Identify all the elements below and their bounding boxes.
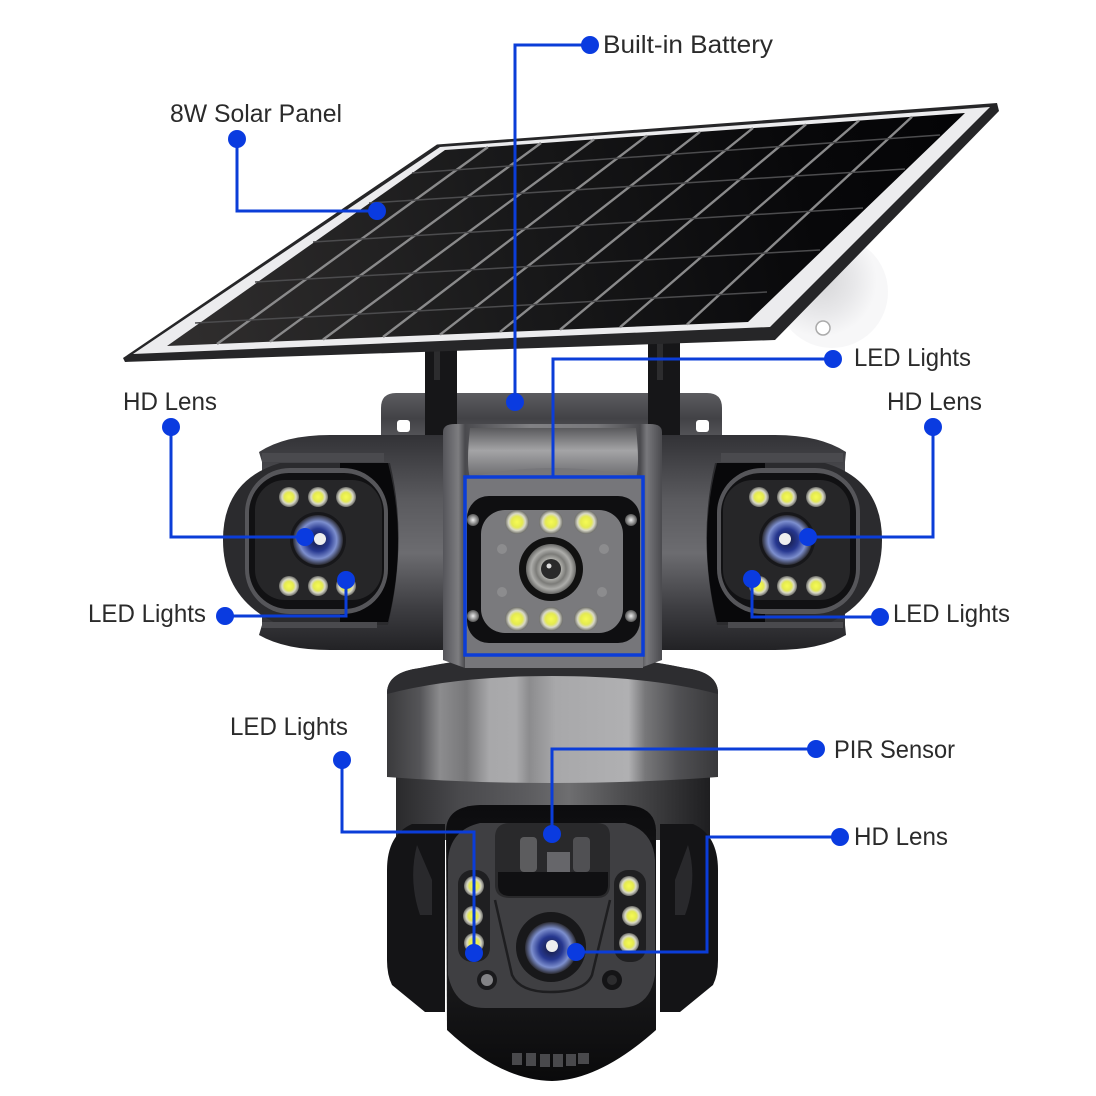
callout: Built-in Battery <box>506 31 774 411</box>
faceplate <box>448 823 655 1008</box>
head dome <box>446 805 656 1081</box>
callout: LED Lights, bottom <box>230 713 483 962</box>
pan-tilt neck cylinder <box>387 655 718 840</box>
icon: HD lens <box>759 512 815 568</box>
callout: HD Lens, left: HD Lens <box>123 388 217 416</box>
back mounting plate <box>381 380 722 445</box>
callout: Built-in Battery: Built-in Battery <box>603 31 774 59</box>
bottom PTZ head <box>387 805 718 1081</box>
icon: white wall mount bracket <box>776 236 888 348</box>
central camera housing <box>467 496 640 643</box>
icon: HD lens <box>290 512 346 568</box>
callout: LED Lights, left <box>88 571 355 628</box>
right camera pod <box>706 453 882 628</box>
right LED strip <box>614 870 646 962</box>
solar panel <box>123 103 999 362</box>
icon: bottom HD lens <box>495 900 610 992</box>
small sensors <box>477 970 622 990</box>
LEDs <box>505 510 598 631</box>
callout: LED Lights, bottom: LED Lights <box>230 713 348 741</box>
side yoke arms <box>387 824 445 1012</box>
IR dots <box>497 544 609 597</box>
callout: HD Lens, right <box>799 388 982 546</box>
horizontal camera body bar <box>259 435 846 650</box>
left LED strip <box>458 870 490 962</box>
camera support poles <box>425 335 680 435</box>
callout: LED Lights, left: LED Lights <box>88 600 206 628</box>
LEDs <box>749 487 826 596</box>
icon: PIR sensor window <box>495 823 610 898</box>
callout: 8W Solar Panel: 8W Solar Panel <box>170 100 342 128</box>
left camera pod <box>223 453 399 628</box>
callout: LED Lights, front camera: LED Lights <box>854 344 971 372</box>
callout: LED Lights, right: LED Lights <box>893 600 1010 628</box>
callout: 8W Solar Panel <box>170 100 386 220</box>
callout: HD Lens, bottom <box>567 823 948 961</box>
speaker vent <box>512 1053 589 1067</box>
icon: central lens <box>519 537 583 601</box>
central camera column <box>443 424 662 668</box>
callout: LED Lights, front camera <box>465 344 971 655</box>
callout: PIR Sensor: PIR Sensor <box>834 736 955 764</box>
callout: LED Lights, right <box>743 570 1010 628</box>
LEDs <box>279 487 356 596</box>
callout: HD Lens, bottom: HD Lens <box>854 823 948 851</box>
callout: PIR Sensor <box>543 736 955 843</box>
screws <box>467 514 637 622</box>
callout: HD Lens, right: HD Lens <box>887 388 982 416</box>
callout: HD Lens, left <box>123 388 314 546</box>
